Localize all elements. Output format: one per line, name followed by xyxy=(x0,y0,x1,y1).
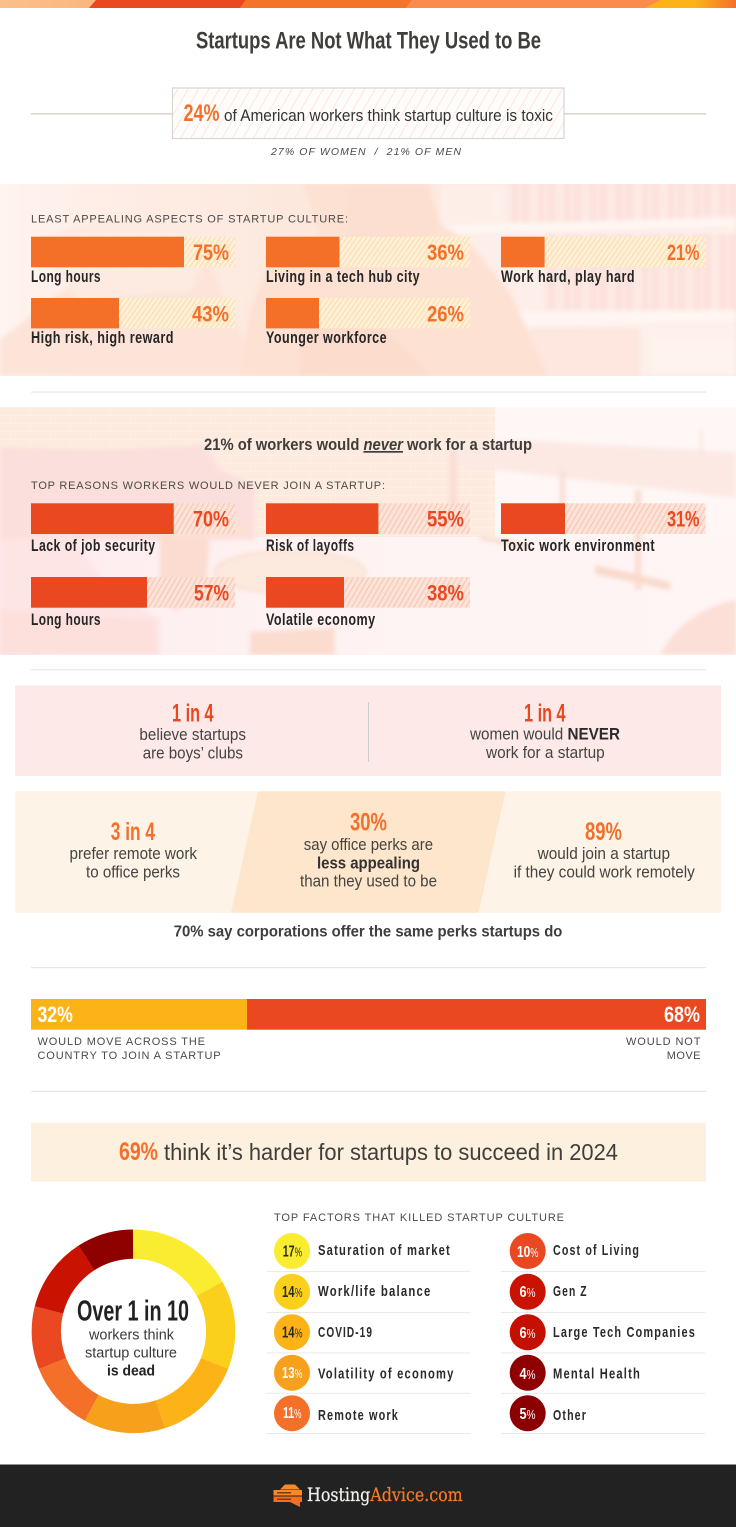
bar: Volatile economy 38% xyxy=(266,577,470,629)
factor: Cost of Living 10%: Cost of Living xyxy=(553,1242,640,1259)
bar: Younger workforce 26%: Younger workforce xyxy=(266,329,387,347)
donut centre text: Over 1 in 10 xyxy=(77,1296,189,1328)
panel: 1 in 4 stats xyxy=(15,685,721,776)
factor: COVID-19 14%: 14% xyxy=(282,1325,302,1342)
stat: women would never: work for a startup xyxy=(485,743,605,762)
factor: Other 5%: Other xyxy=(553,1407,587,1424)
bar: Lack of job security 70% xyxy=(31,503,235,555)
stat: 89% remote: if they could work remotely xyxy=(514,863,695,882)
bar: Lack of job security 70%: 70% xyxy=(193,507,229,532)
panel heading: LEAST APPEALING ASPECTS OF STARTUP CULTURE: xyxy=(31,214,348,226)
factor: Large Tech Companies 6% xyxy=(510,1314,696,1350)
panel: perks stats xyxy=(15,791,721,913)
stat: women would never: 1 in 4 xyxy=(524,700,566,728)
stat: 30% less appealing xyxy=(300,809,437,891)
chart: willingness to move xyxy=(31,999,706,1062)
bar: Risk of layoffs 55%: 55% xyxy=(427,507,464,532)
factor: Work/life balance 14%: Work/life balance xyxy=(318,1283,432,1300)
top colour banner xyxy=(0,0,736,8)
text: corporations offer same perks: 70% say corporations offer the same perks startups do xyxy=(174,924,563,941)
factor: Remote work 11%: 11% xyxy=(283,1405,302,1422)
chart: willingness to move: 68% xyxy=(664,1002,700,1027)
bar: Risk of layoffs 55% xyxy=(266,503,470,555)
donut centre text: startup culture xyxy=(85,1344,177,1362)
panel photo background xyxy=(0,184,736,376)
chart: willingness to move: 32% xyxy=(38,1002,73,1027)
bar: Volatile economy 38%: Volatile economy xyxy=(266,611,376,629)
factor: Cost of Living 10% xyxy=(510,1233,640,1269)
panel: least appealing aspects xyxy=(0,184,736,376)
list heading: top factors: TOP FACTORS THAT KILLED STARTUP CULTURE xyxy=(274,1212,564,1224)
stat: 3 in 4 remote xyxy=(70,818,197,882)
bar: Long hours 57% xyxy=(31,577,235,629)
label: would move xyxy=(38,1036,221,1062)
factor: Volatility of economy 13% xyxy=(274,1355,454,1391)
stat: 89% remote: would join a startup xyxy=(537,844,670,863)
stat: boys' clubs: are boys’ clubs xyxy=(143,744,243,762)
bar: High risk, high reward 43%: 43% xyxy=(192,302,229,326)
factor: Saturation of market 17%: 17% xyxy=(283,1244,302,1260)
factor: COVID-19 14%: COVID-19 xyxy=(318,1324,373,1341)
bar: Long hours 75%: 75% xyxy=(193,240,229,265)
factor: Remote work 11% xyxy=(274,1395,399,1431)
callout: 24% toxic: of American workers think startup culture is toxic xyxy=(224,106,553,125)
factor: Other 5%: 5% xyxy=(520,1406,536,1423)
factor: Mental Health 4%: Mental Health xyxy=(553,1366,641,1382)
panel photo background xyxy=(0,407,736,655)
bar: Work hard, play hard 21%: Work hard, play hard xyxy=(501,268,635,286)
factor: Large Tech Companies 6%: 6% xyxy=(520,1325,536,1342)
stat: 30% less appealing: than they used to be xyxy=(300,872,437,891)
bar: Younger workforce 26%: 26% xyxy=(427,302,464,326)
bar: High risk, high reward 43%: High risk, high reward xyxy=(31,329,174,347)
stat: 3 in 4 remote: prefer remote work xyxy=(70,844,197,863)
stat: 30% less appealing: less appealing xyxy=(317,854,420,873)
bar: Risk of layoffs 55%: Risk of layoffs xyxy=(266,537,354,555)
logo wordmark: HostingAdvice.com xyxy=(307,1484,463,1506)
factor: COVID-19 14% xyxy=(274,1314,373,1350)
label: would move: COUNTRY TO JOIN A STARTUP xyxy=(38,1050,221,1062)
label: would move: WOULD MOVE ACROSS THE xyxy=(38,1036,205,1048)
bar: Long hours 75% xyxy=(31,237,235,286)
title: Startups Are Not What They Used to Be xyxy=(196,28,541,54)
headline: 21% of workers would never work for a startup xyxy=(204,435,532,454)
banner: 69% harder to succeed: think it’s harder for startups to succeed in 2024 xyxy=(164,1139,618,1165)
stat: women would never: women would NEVER xyxy=(469,724,620,744)
bar: Work hard, play hard 21% xyxy=(501,237,706,286)
bar: Living in a tech hub city 36%: Living in a tech hub city xyxy=(266,268,420,286)
bar: High risk, high reward 43% xyxy=(31,298,235,347)
bar: Lack of job security 70%: Lack of job security xyxy=(31,537,156,555)
bar: Work hard, play hard 21%: 21% xyxy=(667,240,700,265)
bar: Living in a tech hub city 36%: 36% xyxy=(427,240,464,265)
callout: 24% toxic: 24% xyxy=(184,100,220,127)
factor: Saturation of market 17% xyxy=(274,1233,451,1269)
donut chart xyxy=(46,1244,221,1419)
stat: 3 in 4 remote: to office perks xyxy=(86,863,180,882)
stat: boys' clubs: believe startups xyxy=(139,725,246,744)
bar: Toxic work environment 31%: Toxic work environment xyxy=(501,537,655,555)
factor: Mental Health 4%: 4% xyxy=(520,1366,536,1383)
factor: Gen Z 6%: Gen Z xyxy=(553,1283,588,1300)
stat: boys' clubs xyxy=(139,700,246,762)
subtext: gender split: 27% OF WOMEN / 21% OF MEN xyxy=(270,146,461,158)
factor: Remote work 11%: Remote work xyxy=(318,1407,399,1424)
factor: Work/life balance 14%: 14% xyxy=(282,1284,302,1301)
icon: HostingAdvice logo xyxy=(274,1484,302,1507)
panel: would never work for a startup xyxy=(0,407,736,655)
factor: Work/life balance 14% xyxy=(274,1274,432,1310)
label: would not move: WOULD NOT xyxy=(626,1036,701,1048)
callout: 24% toxic xyxy=(31,88,706,138)
stat: women would never xyxy=(469,700,620,762)
factor: Gen Z 6%: 6% xyxy=(520,1284,536,1301)
banner: 69% harder to succeed xyxy=(31,1123,706,1182)
factor: Saturation of market 17%: Saturation of market xyxy=(318,1242,451,1259)
stat: 89% remote xyxy=(514,818,695,882)
bar: Long hours 57%: Long hours xyxy=(31,611,101,629)
donut centre text: workers think xyxy=(88,1326,174,1344)
bar: Volatile economy 38%: 38% xyxy=(427,580,464,605)
factor: Volatility of economy 13%: 13% xyxy=(282,1365,302,1382)
donut centre text xyxy=(77,1296,189,1380)
factor: Gen Z 6% xyxy=(510,1274,588,1310)
factor: Cost of Living 10%: 10% xyxy=(517,1244,538,1261)
factor: Volatility of economy 13%: Volatility of economy xyxy=(318,1366,454,1382)
donut centre text: is dead xyxy=(107,1362,155,1380)
stat: 30% less appealing: say office perks are xyxy=(304,835,433,854)
footer xyxy=(0,1464,736,1527)
factor: Other 5% xyxy=(510,1395,587,1431)
factor list xyxy=(267,1233,705,1434)
bar: Toxic work environment 31%: 31% xyxy=(667,507,700,532)
bar: Younger workforce 26% xyxy=(266,298,470,347)
stat: 3 in 4 remote: 3 in 4 xyxy=(111,818,155,846)
bar: Toxic work environment 31% xyxy=(501,503,706,555)
factor: Mental Health 4% xyxy=(510,1355,641,1391)
bar: Long hours 57%: 57% xyxy=(194,580,229,605)
panel heading: TOP REASONS WORKERS WOULD NEVER JOIN A STARTUP: xyxy=(31,480,385,492)
banner: 69% harder to succeed: 69% xyxy=(119,1138,158,1166)
label: would not move: MOVE xyxy=(667,1050,700,1062)
label: would not move xyxy=(626,1036,701,1062)
stat: boys' clubs: 1 in 4 xyxy=(172,700,214,728)
stat: 89% remote: 89% xyxy=(585,818,622,846)
stat: 30% less appealing: 30% xyxy=(350,809,387,837)
bar: Living in a tech hub city 36% xyxy=(266,237,470,286)
bar: Long hours 75%: Long hours xyxy=(31,268,101,286)
